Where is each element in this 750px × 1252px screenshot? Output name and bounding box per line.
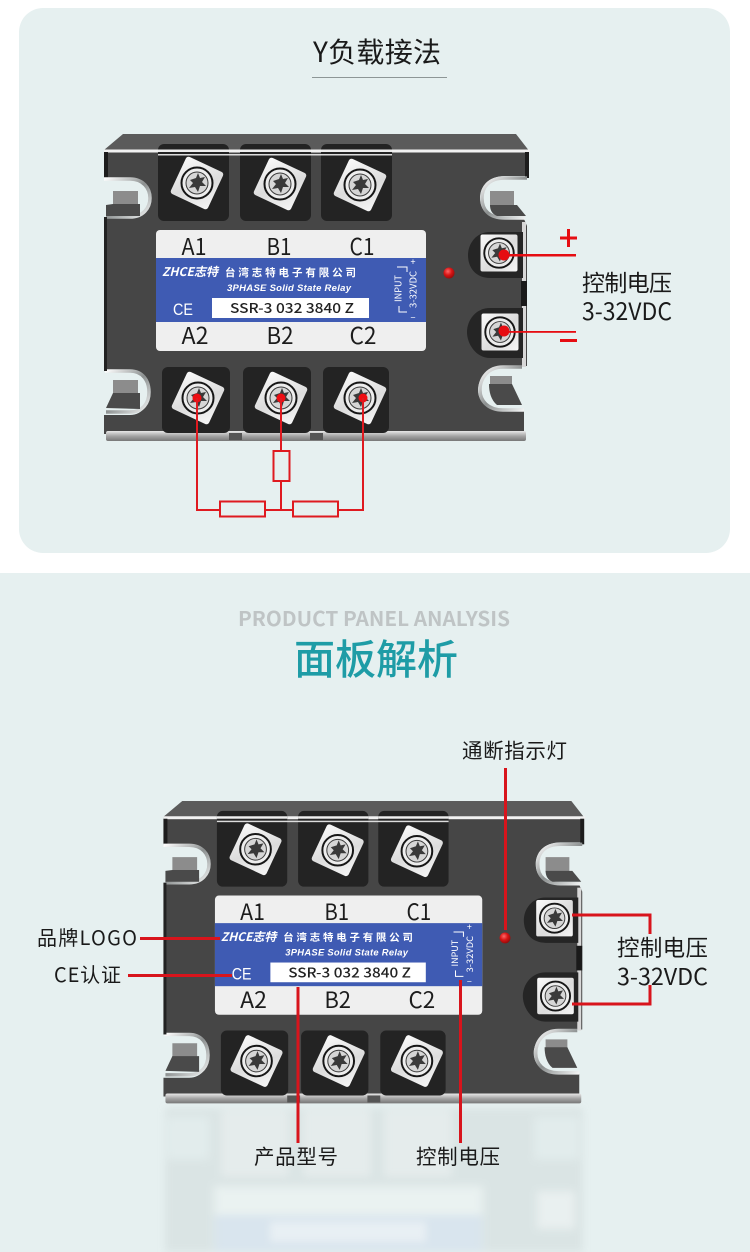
terminal labels top: B1 — [266, 228, 292, 262]
input spec: + — [467, 920, 472, 933]
input spec: INPUT — [392, 274, 404, 302]
CE mark: CE — [232, 964, 252, 983]
plus sign — [560, 229, 577, 247]
Y load circuit — [192, 394, 368, 516]
heading: Y load wiring: Y负载接法 — [312, 31, 441, 71]
callout: control voltage bottom — [416, 980, 500, 1170]
terminal labels bottom: A2 — [182, 317, 208, 351]
text: control voltage: 控制电压 — [582, 264, 672, 298]
callout: control voltage right: 控制电压 — [617, 931, 708, 963]
callout: CE certification: CE认证 — [54, 959, 121, 988]
callout: brand logo — [37, 922, 220, 951]
CE mark: CE — [173, 300, 193, 319]
section background: lower panel — [0, 573, 750, 1252]
reflection of relay — [165, 1108, 583, 1252]
terminal labels top: A1 — [182, 228, 206, 262]
company name: 台湾志特电子有限公司 — [283, 929, 413, 944]
text: control voltage: 3-32VDC — [582, 292, 672, 327]
terminal labels top: B1 — [324, 894, 349, 927]
input spec: 3-32VDC — [406, 271, 420, 308]
callout: brand logo: 品牌LOGO — [37, 922, 137, 951]
input spec: + — [410, 255, 416, 268]
terminal labels top: C1 — [407, 894, 431, 927]
terminal labels bottom: B2 — [324, 982, 351, 1015]
terminal labels bottom — [240, 982, 435, 1015]
company name: 台湾志特电子有限公司 — [225, 265, 356, 280]
text: control voltage — [582, 264, 672, 327]
terminal labels bottom — [182, 317, 376, 351]
input spec — [448, 920, 476, 988]
brand logo: ZHCE志特 — [221, 928, 278, 945]
wiring: control voltage lines — [498, 250, 576, 336]
input spec: − — [467, 975, 472, 988]
callout: indicator light — [462, 734, 567, 930]
callout: control voltage right: 3-32VDC — [617, 958, 708, 992]
terminal labels bottom: B2 — [266, 317, 294, 351]
input spec — [392, 255, 420, 324]
product line: 3PHASE Solid State Relay — [227, 283, 352, 294]
callout: control voltage bottom: 控制电压 — [416, 1140, 500, 1170]
product line: 3PHASE Solid State Relay — [285, 948, 409, 958]
heading: panel analysis: 面板解析 — [294, 626, 458, 686]
model number: SSR-3 032 3840 Z — [230, 297, 354, 317]
subtitle: english: PRODUCT PANEL ANALYSIS — [238, 603, 510, 632]
relay: panel analysis — [163, 801, 585, 1103]
minus sign — [560, 339, 577, 342]
terminal labels top — [182, 228, 374, 262]
callout: indicator light: 通断指示灯 — [462, 734, 567, 764]
terminal labels bottom: C2 — [350, 317, 376, 351]
callout: model number — [254, 987, 338, 1170]
input spec: INPUT — [448, 939, 461, 966]
callout: model number: 产品型号 — [254, 1140, 338, 1170]
terminal labels top: C1 — [350, 228, 374, 262]
brand logo: ZHCE志特 — [162, 263, 220, 280]
input spec: − — [410, 311, 416, 324]
terminal labels top — [240, 894, 431, 927]
terminal labels top: A1 — [240, 894, 265, 927]
terminal labels bottom: A2 — [240, 982, 267, 1015]
input spec: 3-32VDC — [463, 936, 476, 972]
terminal labels bottom: C2 — [408, 982, 435, 1015]
model number: SSR-3 032 3840 Z — [288, 962, 411, 981]
callout: control voltage right — [572, 915, 708, 1004]
callout: CE certification — [54, 959, 232, 988]
panel: Y load wiring card — [19, 8, 730, 553]
relay: wiring diagram — [104, 134, 530, 441]
